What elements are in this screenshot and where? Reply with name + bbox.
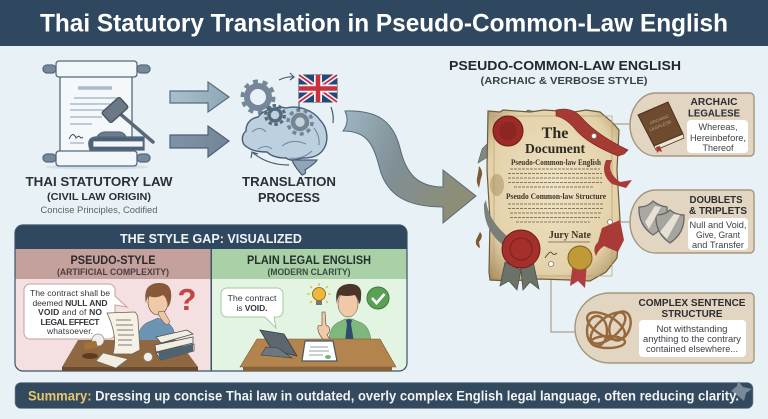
icon: green check bbox=[367, 287, 389, 309]
heading: pseudo-common-law English: PSEUDO-COMMON-LAW ENGLISH bbox=[449, 58, 681, 73]
arrow: upper bbox=[170, 82, 229, 112]
callout: archaic legalese: ARCHAIC bbox=[690, 96, 738, 108]
left column heading: PSEUDO-STYLE bbox=[70, 255, 156, 267]
speech bubble: plain style: is VOID. bbox=[236, 303, 268, 313]
icon: aged document with seals: Document bbox=[525, 142, 585, 157]
left column heading bbox=[57, 255, 169, 277]
panel: the style gap bbox=[15, 225, 407, 371]
icon: old book: ARCHAIC bbox=[649, 113, 670, 126]
arrow: lower bbox=[170, 126, 229, 157]
icon: statutory scroll with gavel bbox=[43, 61, 153, 170]
callout: archaic legalese: Thereof bbox=[702, 143, 734, 154]
illustration: confused man at messy desk bbox=[62, 282, 198, 371]
heading: style gap: THE STYLE GAP: VISUALIZED bbox=[120, 231, 302, 246]
speech bubble: pseudo style bbox=[24, 284, 127, 339]
callout: archaic legalese bbox=[630, 93, 754, 156]
label: translation process: PROCESS bbox=[258, 190, 320, 205]
label: translation process bbox=[242, 174, 336, 205]
callout: doublets and triplets: and Transfer bbox=[692, 240, 744, 251]
connector lines bbox=[551, 124, 632, 332]
right column heading: PLAIN LEGAL ENGLISH bbox=[247, 255, 371, 267]
illustration: confident man at tidy desk bbox=[240, 283, 396, 371]
speech bubble: pseudo style: whatsoever. bbox=[46, 326, 93, 336]
callout: doublets and triplets: Give, Grant bbox=[696, 230, 740, 241]
icon: old book bbox=[638, 102, 684, 153]
callout: archaic legalese: Whereas, bbox=[698, 122, 738, 133]
label: Thai statutory law: THAI STATUTORY LAW bbox=[26, 174, 173, 189]
icon: UK flag bbox=[299, 75, 337, 102]
label: Thai statutory law: (CIVIL LAW ORIGIN) bbox=[47, 192, 151, 203]
callout: doublets and triplets: DOUBLETS bbox=[690, 194, 742, 206]
callout: complex sentence structure: Not withstanding bbox=[656, 324, 728, 335]
icon: shields bbox=[639, 201, 684, 243]
callout: doublets and triplets bbox=[630, 190, 754, 253]
speech bubble: pseudo style: deemed NULL AND bbox=[32, 298, 108, 308]
summary bar: Summary: Dressing up concise Thai law in outdated, overly complex English legal language, often reducing clarity. bbox=[28, 388, 739, 404]
icon: brain, gears and flag bbox=[242, 73, 337, 175]
icon: aged document with seals: Pseudo-Common-law English bbox=[511, 158, 601, 167]
arrow: curved flow to document bbox=[343, 111, 476, 223]
speech bubble: pseudo style: The contract shall be bbox=[30, 288, 110, 298]
label: Thai statutory law bbox=[26, 174, 173, 215]
speech bubble: pseudo style: VOID and of NO bbox=[38, 307, 102, 317]
icon: knotted rope bbox=[583, 307, 635, 349]
callout: complex sentence structure: STRUCTURE bbox=[662, 308, 722, 320]
heading: pseudo-common-law English: (ARCHAIC & VERBOSE STYLE) bbox=[480, 75, 648, 87]
icon: question mark: ? bbox=[178, 282, 196, 317]
callout: complex sentence structure bbox=[575, 293, 754, 363]
callout: complex sentence structure: contained elsewhere... bbox=[646, 344, 738, 355]
title: Thai Statutory Translation in Pseudo-Common-Law English bbox=[40, 10, 728, 38]
label: translation process: TRANSLATION bbox=[242, 174, 336, 189]
heading: pseudo-common-law English bbox=[449, 58, 681, 87]
summary bar bbox=[15, 381, 753, 408]
callout: complex sentence structure: anything to the contrary bbox=[643, 334, 741, 345]
speech bubble: plain style: The contract bbox=[228, 293, 277, 303]
right column heading: (MODERN CLARITY) bbox=[268, 267, 351, 277]
speech bubble: pseudo style: LEGAL EFFECT bbox=[40, 317, 100, 327]
callout: archaic legalese: Hereinbefore, bbox=[690, 133, 746, 144]
callout: doublets and triplets: Null and Void, bbox=[690, 220, 746, 231]
icon: aged document with seals: The bbox=[542, 125, 568, 142]
callout: archaic legalese: LEGALESE bbox=[688, 108, 740, 120]
title bbox=[0, 0, 768, 46]
callout: doublets and triplets: & TRIPLETS bbox=[689, 205, 747, 217]
callout: complex sentence structure: COMPLEX SENTENCE bbox=[638, 297, 746, 309]
icon: aged document with seals: Pseudo Common-law Structure bbox=[506, 192, 606, 201]
right column heading bbox=[247, 255, 371, 277]
icon: light bulb bbox=[307, 283, 331, 305]
icon: aged document with seals: Jury Nate bbox=[549, 230, 592, 241]
icon: aged document with seals bbox=[476, 109, 632, 290]
label: Thai statutory law: Concise Principles, Codified bbox=[40, 205, 158, 215]
speech bubble: plain style bbox=[221, 288, 283, 328]
icon: old book: LEGALESE bbox=[649, 119, 672, 132]
left column heading: (ARTIFICIAL COMPLEXITY) bbox=[57, 267, 169, 277]
